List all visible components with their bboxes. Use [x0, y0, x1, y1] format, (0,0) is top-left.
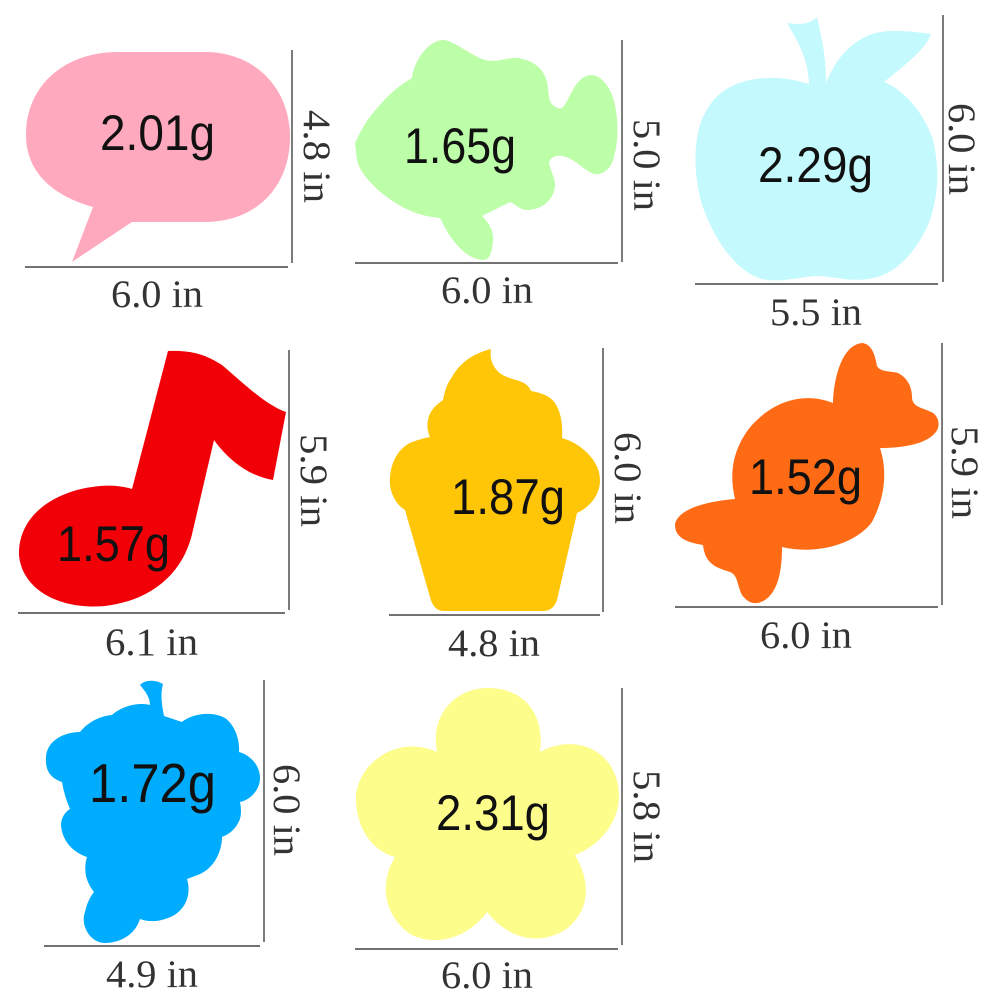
dimensions: fish: 5.0 in — [625, 119, 668, 211]
dimensions: cupcake: 4.8 in — [448, 622, 540, 665]
dimensions: fish — [355, 40, 668, 312]
dimensions: candy: 6.0 in — [760, 614, 852, 657]
dimensions: music note: 5.9 in — [292, 434, 335, 527]
dimensions: flower — [355, 688, 668, 997]
weight: 2.29g: 2.29g — [758, 137, 873, 193]
dimensions: music note: 6.1 in — [105, 621, 198, 664]
dimensions: candy: 5.9 in — [943, 426, 986, 519]
weight: 2.01g: 2.01g — [100, 105, 215, 161]
weight: 1.57g: 1.57g — [57, 516, 170, 572]
shape: pale yellow flower — [355, 688, 668, 997]
shape: pink speech bubble — [25, 50, 338, 316]
dimensions: grapes: 4.9 in — [106, 953, 198, 996]
shape: red music note — [18, 350, 335, 664]
dimensions: speech bubble: 4.8 in — [295, 110, 338, 203]
weight: 1.52g: 1.52g — [749, 449, 862, 505]
dimensions: speech bubble — [25, 50, 338, 316]
weight: 1.65g: 1.65g — [404, 118, 516, 174]
shape: light blue apple — [695, 15, 983, 334]
dimensions: apple: 5.5 in — [770, 291, 862, 334]
shape: green fish — [355, 40, 668, 312]
dimensions: grapes — [44, 680, 308, 996]
shape: orange candy — [675, 343, 986, 657]
weight: 1.87g: 1.87g — [451, 469, 565, 525]
shape: blue grapes — [44, 680, 308, 996]
dimensions: speech bubble: 6.0 in — [111, 273, 203, 316]
dimensions: flower: 6.0 in — [441, 954, 533, 997]
dimensions: cupcake: 6.0 in — [606, 432, 649, 524]
dimensions: grapes: 6.0 in — [265, 764, 308, 856]
dimensions: candy — [675, 343, 986, 657]
weight: 1.72g: 1.72g — [89, 752, 216, 814]
dimensions: fish: 6.0 in — [441, 269, 533, 312]
dimensions: apple: 6.0 in — [940, 103, 983, 195]
dimensions: flower: 5.8 in — [625, 770, 668, 863]
shape: yellow cupcake — [389, 348, 649, 665]
dimensions: cupcake — [389, 348, 649, 665]
dimensions: apple — [695, 15, 983, 334]
weight: 2.31g: 2.31g — [436, 785, 550, 841]
dimensions: music note — [18, 350, 335, 664]
